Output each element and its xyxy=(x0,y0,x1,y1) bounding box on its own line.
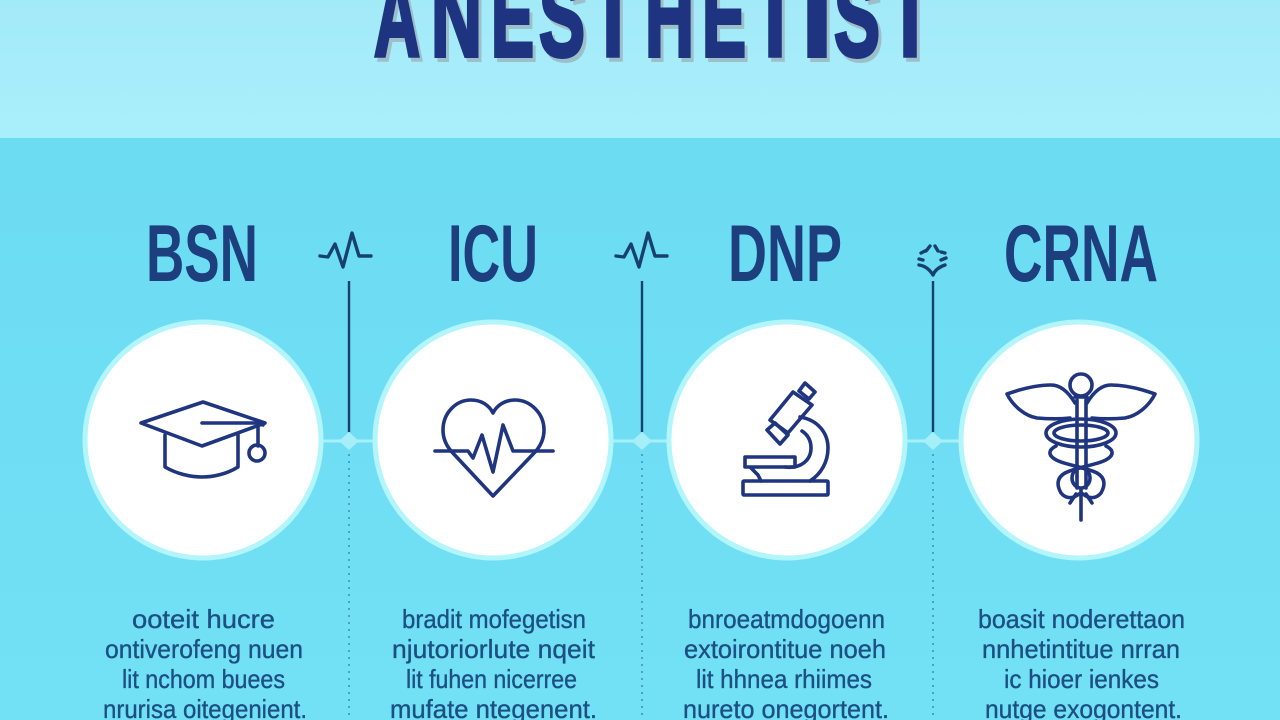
text block: DNP xyxy=(683,604,889,720)
text block: CRNA: ic hioer ienkes xyxy=(1004,664,1159,694)
text block: ICU: bradit mofegetisn xyxy=(402,604,586,634)
text block: BSN: ooteit hucre xyxy=(132,604,275,634)
text block: CRNA: boasit noderettaon xyxy=(978,604,1185,634)
icon: pulse 2 xyxy=(616,233,667,267)
text block: CRNA xyxy=(978,604,1185,720)
text block: ICU: njutoriorlute nqeit xyxy=(392,634,596,664)
connector: ICU to DNP xyxy=(610,281,672,720)
icon: graduation cap xyxy=(141,402,265,477)
heading: DNP: DNP xyxy=(728,209,842,299)
heading: ICU: ICU xyxy=(448,209,538,299)
text block: DNP: lit hhnea rhiimes xyxy=(696,664,872,694)
text block: BSN: ontiverofeng nuen xyxy=(105,634,303,664)
heading: CRNA: CRNA xyxy=(1004,209,1158,299)
text block: ICU xyxy=(390,604,597,720)
title xyxy=(374,0,936,84)
icon: heart with pulse xyxy=(435,400,553,496)
circle: BSN xyxy=(85,322,321,558)
connector: DNP to CRNA xyxy=(903,281,965,720)
text block: DNP: extoirontitue noeh xyxy=(684,634,886,664)
header band xyxy=(0,0,1280,138)
heading: BSN: BSN xyxy=(146,209,258,299)
text block: ICU: lit fuhen nicerree xyxy=(406,664,577,694)
text block: BSN xyxy=(103,604,307,720)
text block: CRNA: nnhetintitue nrran xyxy=(982,634,1180,664)
circle: CRNA xyxy=(961,322,1197,558)
circle: ICU xyxy=(375,322,611,558)
icon: spark xyxy=(919,246,946,275)
icon: microscope xyxy=(743,383,828,495)
text block: BSN: lit nchom buees xyxy=(122,664,285,694)
icon: pulse 1 xyxy=(320,233,371,267)
circle: DNP xyxy=(669,322,905,558)
connector: BSN to ICU xyxy=(318,281,380,720)
icon: caduceus xyxy=(1007,374,1155,520)
text block: DNP: bnroeatmdogoenn xyxy=(688,604,885,634)
